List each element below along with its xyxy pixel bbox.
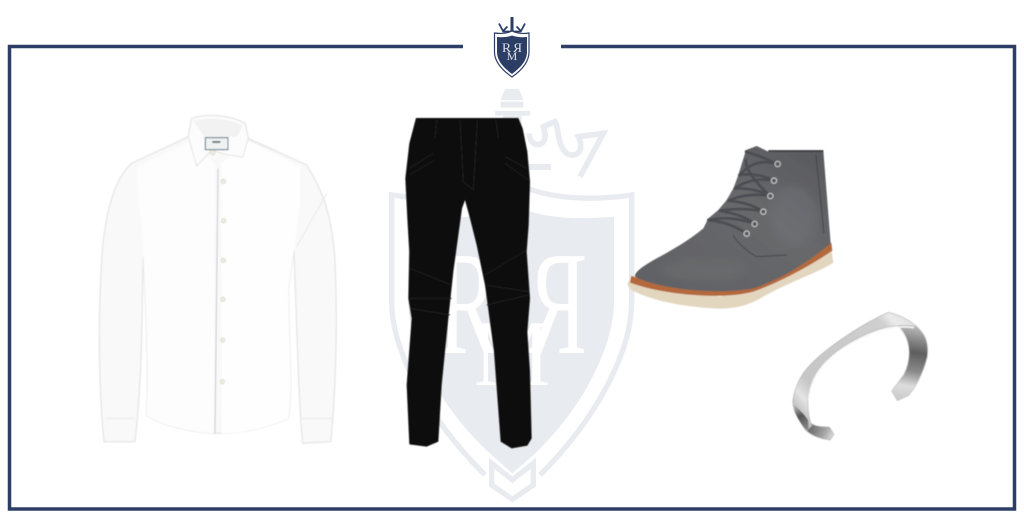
shirt	[99, 116, 336, 443]
logo: mirrored letter R: R	[513, 40, 522, 55]
logo: shield	[494, 31, 529, 77]
shirt: sleeves and outline	[99, 116, 336, 443]
watermark: crest	[392, 89, 632, 499]
bracelet	[793, 312, 928, 440]
boot: welt	[630, 243, 832, 296]
watermark: mirrored letter R: R	[527, 222, 587, 386]
bracelet: dark reflection	[793, 402, 809, 430]
pants: silhouette	[405, 118, 532, 448]
boot	[627, 146, 833, 309]
boot: eyelets	[744, 161, 780, 236]
bracelet: band	[793, 312, 916, 431]
bracelet: near end	[807, 422, 834, 440]
logo: crest	[494, 17, 529, 77]
logo: letter M: M	[507, 49, 518, 63]
shirt: buttons	[210, 150, 226, 384]
watermark: sword and crown	[495, 89, 603, 177]
bracelet: highlight edge	[809, 327, 914, 400]
watermark: letter R: R	[438, 222, 498, 386]
watermark: shield outline	[392, 180, 632, 475]
boot: laces	[708, 152, 777, 234]
watermark: tip chevron	[492, 463, 533, 499]
logo: letter R: R	[502, 40, 511, 55]
logo: crown and sword	[499, 17, 525, 33]
bracelet: inner far side	[892, 325, 928, 401]
pants: seams	[409, 120, 529, 315]
shirt: label	[205, 138, 228, 150]
watermark: letter M: M	[474, 302, 550, 406]
shirt: front panels	[137, 142, 215, 433]
shirt: placket line	[215, 168, 218, 433]
shirt: collar	[188, 116, 248, 166]
boot: sole	[627, 245, 833, 309]
boot: upper	[635, 146, 831, 291]
boot: seams	[733, 155, 824, 257]
watermark: shield fill	[408, 203, 614, 473]
pants	[405, 118, 532, 448]
boot: suede shading	[770, 187, 817, 247]
shirt: yoke seams	[105, 137, 332, 418]
